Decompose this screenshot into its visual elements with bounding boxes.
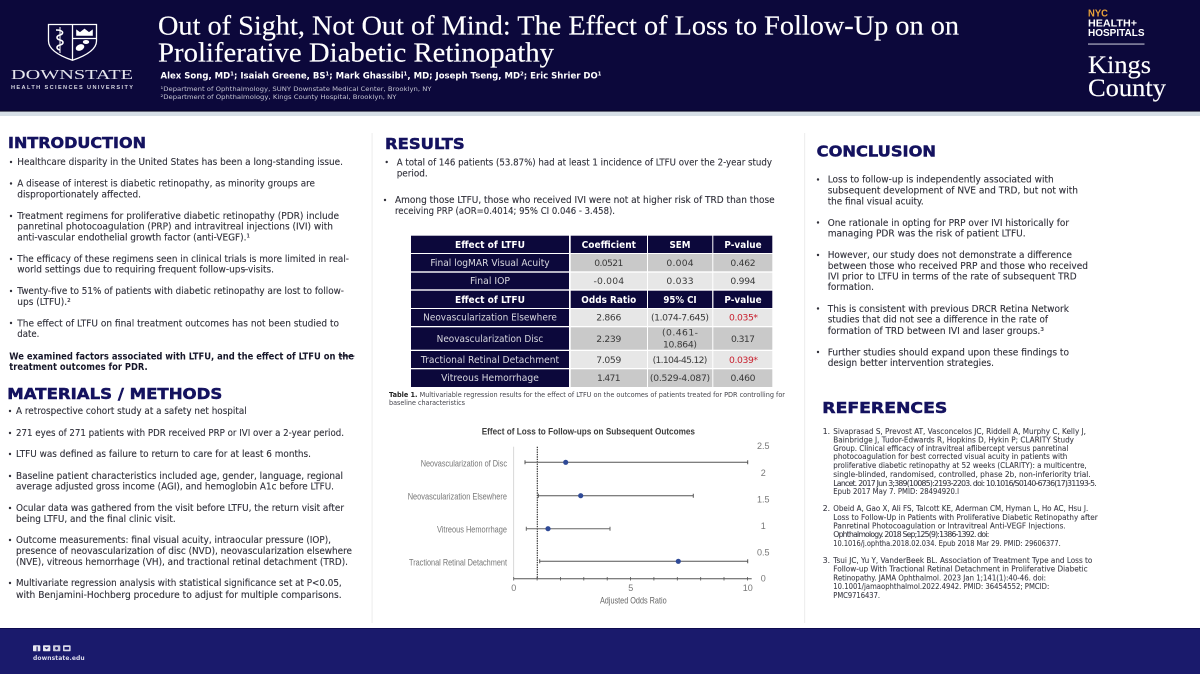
- text block: reference list: 10.1001/jamaophthalmol.2022.4942. PMID: 36454552; PMCID:: [833, 582, 1049, 591]
- row: tractional retinal detachment: Tractional Retinal Detachment: [409, 558, 507, 568]
- row: vitreous hemorrhage: Vitreous Hemorrhage: [437, 525, 507, 535]
- logo: NYC Health + Hospitals Kings County: Kings: [1088, 50, 1151, 79]
- text block: introduction bullets: date.: [17, 329, 39, 340]
- text block: reference list: Ophthalmology. 2018 Sep;125(9):1386-1392. doi:: [833, 530, 989, 539]
- text block: introduction bullets: panretinal photocoagulation (PRP) and intravitreal injections (IVI) with: [17, 222, 333, 233]
- x axis labels: 5: [628, 583, 633, 593]
- text block: conclusion bullets: Loss to follow-up is independently associated with: [828, 174, 1054, 186]
- text block: introduction bullets: Treatment regimens for proliferative diabetic retinopathy (PDR) include: [16, 211, 339, 222]
- text block: results bullets: [384, 157, 775, 217]
- text block: methods bullets: Baseline patient characteristics included age, gender, language, regional: [16, 471, 343, 482]
- text block: introduction bullets: Healthcare disparity in the United States has been a long-standing issue.: [17, 157, 343, 168]
- table: regression results: SEM: [670, 240, 690, 251]
- text block: reference list: Loss to Follow-Up in Patients with Proliferative Diabetic Retinopathy after: [833, 513, 1098, 522]
- table: regression results: Tractional Retinal Detachment: [420, 355, 559, 366]
- table: regression results: Coefficient: [582, 240, 636, 251]
- logo: NYC Health + Hospitals Kings County: [1088, 8, 1166, 102]
- text block: introduction bullets: Twenty-five to 51% of patients with diabetic retinopathy are lost to follow-: [16, 286, 344, 297]
- text block: introduction bullets: The efficacy of these regimens seen in clinical trials is more limited in real-: [16, 254, 349, 265]
- text block: methods bullets: Outcome measurements: final visual acuity, intraocular pressure (IOP),: [16, 535, 331, 546]
- text block: reference list: Panretinal Photocoagulation or Intravitreal Anti-VEGF Injections.: [833, 522, 1066, 530]
- table: regression results: 0.317: [731, 334, 755, 345]
- title: Out of Sight, Not Out of Mind: The Effect of Loss to Follow-Up on on: [158, 10, 959, 40]
- text block: methods bullets: [9, 406, 352, 601]
- table: regression results: 1.471: [597, 373, 621, 384]
- table: regression results: (0.529-4.087): [650, 373, 710, 384]
- text block: study aim: [9, 351, 355, 373]
- table: regression results: Effect of LTFU: [455, 240, 525, 251]
- table: regression results: 0.004: [666, 258, 694, 269]
- chart: forest plot of adjusted odds ratios: [408, 426, 770, 605]
- chart title: Effect of Loss to Follow-ups on Subsequent Outcomes: [482, 426, 695, 436]
- text block: methods bullets: A retrospective cohort study at a safety net hospital: [16, 406, 247, 417]
- text block: reference list: 3.: [823, 556, 830, 565]
- text block: study aim: treatment outcomes for PDR.: [9, 362, 148, 373]
- secondary y axis labels: 2.5: [757, 441, 770, 451]
- text block: introduction bullets: ups (LTFU).²: [17, 297, 71, 308]
- table caption: Table 1. Multivariable regression results for the effect of LTFU on the outcomes of patients treated for PDR controlling for: [389, 390, 785, 399]
- text block: results bullets: A total of 146 patients (53.87%) had at least 1 incidence of LTFU over the 2-year study: [397, 157, 772, 168]
- text block: introduction bullets: A disease of interest is diabetic retinopathy, as minority groups are: [17, 178, 315, 190]
- secondary y axis labels: 1.5: [757, 495, 770, 505]
- row: neovascularization elsewhere: Neovascularization Elsewhere: [408, 492, 507, 502]
- table caption: [389, 390, 785, 407]
- table: regression results: 0.039*: [729, 355, 758, 366]
- heading: conclusion: CONCLUSION: [817, 142, 936, 160]
- text block: reference list: Epub 2017 May 7. PMID: 28494920.l: [833, 487, 959, 496]
- table: regression results: Final IOP: [470, 276, 510, 287]
- text block: reference list: Follow-up With Tractional Retinal Detachment in Proliferative Diabetic: [833, 564, 1088, 574]
- title: [158, 10, 959, 68]
- text block: conclusion bullets: subsequent development of NVE and TRD, but not with: [828, 185, 1078, 196]
- panel: conclusion: [817, 142, 1088, 369]
- text block: reference list: Obeid A, Gao X, Ali FS, Talcott KE, Aderman CM, Hyman L, Ho AC, Hsu J.: [833, 504, 1088, 513]
- heading: results: RESULTS: [385, 135, 465, 153]
- text block: conclusion bullets: the final visual acuity.: [828, 196, 924, 207]
- panel: materials and methods: [7, 385, 352, 601]
- text block: introduction bullets: disproportionately affected.: [17, 189, 141, 200]
- text block: methods bullets: presence of neovascularization of disc (NVD), neovascularization elsewhere: [16, 546, 352, 557]
- x axis labels: Adjusted Odds Ratio: [600, 594, 667, 605]
- affiliations: ²Department of Ophthalmology, Kings County Hospital, Brooklyn, NY: [160, 93, 397, 101]
- text block: methods bullets: Multivariate regression analysis with statistical significance set at P<0.05,: [16, 578, 342, 589]
- text block: reference list: [823, 427, 1098, 600]
- text block: reference list: Group. Clinical efficacy of intravitreal aflibercept versus panretinal: [833, 444, 1068, 453]
- text block: results bullets: Among those LTFU, those who received IVI were not at higher risk of TRD than those: [395, 195, 775, 206]
- text block: conclusion bullets: One rationale in opting for PRP over IVI historically for: [828, 218, 1069, 229]
- table: regression results: 0.0521: [594, 258, 623, 269]
- text block: methods bullets: 271 eyes of 271 patients with PDR received PRP or IVI over a 2-year period.: [16, 428, 344, 439]
- heading: introduction: INTRODUCTION: [8, 134, 146, 152]
- text block: conclusion bullets: formation of TRD between IVI and laser groups.³: [828, 326, 1044, 337]
- text block: introduction bullets: [10, 157, 349, 340]
- table: regression results: 0.994: [730, 276, 756, 287]
- table: regression results: Final logMAR Visual Acuity: [430, 258, 550, 269]
- table: regression results: 95% CI: [663, 295, 697, 306]
- table: regression results: (0.461-: [662, 328, 698, 339]
- panel: results: [384, 135, 785, 605]
- table: regression results: (1.104-45.12): [653, 355, 707, 366]
- footer website: downstate.edu: [33, 655, 85, 662]
- table: regression results: 10.864): [663, 340, 697, 351]
- text block: reference list: Retinopathy. JAMA Ophthalmol. 2023 Jan 1;141(1):40-46. doi:: [833, 574, 1046, 582]
- row: vitreous hemorrhage: [437, 525, 610, 535]
- heading: references: REFERENCES: [822, 399, 947, 417]
- secondary y axis labels: [757, 441, 770, 584]
- table: regression results: -0.004: [593, 276, 624, 287]
- logo: NYC Health + Hospitals Kings County: HEALTH+: [1088, 18, 1137, 30]
- row: neovascularization of disc: [421, 458, 748, 468]
- table: regression results: Vitreous Hemorrhage: [441, 373, 539, 384]
- text block: results bullets: receiving PRP (aOR=0.4014; 95% CI 0.046 - 3.458).: [395, 206, 615, 217]
- text block: conclusion bullets: This is consistent with previous DRCR Retina Network: [827, 304, 1069, 315]
- text block: introduction bullets: world settings due to requiring frequent follow-ups visits.: [17, 265, 274, 276]
- logo: Downstate: [11, 24, 133, 91]
- text block: conclusion bullets: IVI prior to LTFU in terms of the rate of subsequent TRD: [828, 272, 1077, 283]
- text block: introduction bullets: anti-vascular endothelial growth factor (anti-VEGF).¹: [17, 232, 250, 243]
- text block: methods bullets: average adjusted gross income (AGI), and hemoglobin A1c before LTFU.: [16, 482, 334, 492]
- text block: methods bullets: LTFU was defined as failure to return to care for at least 6 months.: [16, 449, 311, 460]
- table: regression results: Effect of LTFU: [455, 295, 525, 306]
- secondary y axis labels: 0.5: [757, 547, 770, 557]
- panel: references: [822, 399, 1098, 600]
- text block: conclusion bullets: studies that did not see a difference in the rate of: [828, 314, 1049, 326]
- text block: results bullets: period.: [397, 168, 428, 179]
- title: Proliferative Diabetic Retinopathy: [158, 36, 554, 68]
- text block: reference list: single-blinded, randomised, controlled, phase 2b, non-inferiority trial.: [833, 470, 1091, 479]
- text block: conclusion bullets: managing PDR was the risk of patient LTFU.: [828, 228, 1026, 240]
- text block: reference list: Tsui JC, Yu Y, VanderBeek BL. Association of Treatment Type and Loss to: [832, 556, 1093, 565]
- table: regression results: P-value: [724, 240, 762, 251]
- x axis labels: [511, 583, 753, 605]
- logo: Downstate: HEALTH SCIENCES UNIVERSITY: [11, 85, 133, 91]
- text block: conclusion bullets: However, our study does not demonstrate a difference: [828, 250, 1072, 261]
- table: regression results: 0.460: [730, 373, 756, 384]
- table: regression results: [411, 236, 772, 387]
- text block: reference list: proliferative diabetic retinopathy at 52 weeks (CLARITY): a multicentre,: [833, 461, 1087, 470]
- text block: conclusion bullets: Further studies should expand upon these findings to: [828, 348, 1069, 358]
- text block: conclusion bullets: [817, 174, 1088, 369]
- text block: reference list: 1.: [823, 427, 830, 436]
- panel: introduction: [8, 134, 354, 373]
- affiliations: [160, 85, 432, 101]
- text block: reference list: 10.1016/j.ophtha.2018.02.034. Epub 2018 Mar 29. PMID: 29606377.: [833, 539, 1061, 548]
- text block: methods bullets: (NVE), vitreous hemorrhage (VH), and tractional retinal detachment (TRD).: [16, 557, 348, 568]
- text block: methods bullets: with Benjamini-Hochberg procedure to adjust for multiple comparisons.: [16, 590, 342, 601]
- text block: reference list: photocoagulation for best corrected visual acuity in patients with: [833, 452, 1067, 461]
- table caption: baseline characteristics: [389, 398, 465, 407]
- secondary y axis labels: 2: [761, 468, 766, 478]
- text block: reference list: Lancet. 2017 Jun 3;389(10085):2193-2203. doi: 10.1016/S0140-6736(17)31193-5.: [833, 479, 1097, 488]
- logo: NYC Health + Hospitals Kings County: HOSPITALS: [1088, 28, 1145, 39]
- logo: NYC Health + Hospitals Kings County: NYC: [1088, 8, 1108, 20]
- text block: introduction bullets: The effect of LTFU on final treatment outcomes has not been studied to: [16, 318, 339, 329]
- row: neovascularization of disc: Neovascularization of Disc: [421, 458, 507, 468]
- secondary y axis labels: 0: [761, 574, 766, 584]
- text block: reference list: PMC9716437.: [833, 591, 880, 600]
- x axis labels: 0: [511, 583, 516, 593]
- footer banner: [0, 628, 1200, 674]
- table: regression results: Neovascularization Elsewhere: [423, 312, 557, 324]
- table: regression results: 0.035*: [729, 312, 758, 324]
- table: regression results: 0.033: [666, 276, 694, 287]
- logo: Downstate: DOWNSTATE: [11, 67, 133, 82]
- logo: NYC Health + Hospitals Kings County: County: [1088, 73, 1166, 102]
- table: regression results: (1.074-7.645): [651, 312, 709, 324]
- icons: social media: [33, 645, 71, 651]
- authors: Alex Song, MD¹; Isaiah Greene, BS¹; Mark Ghassibi¹, MD; Joseph Tseng, MD²; Eric Shrier DO¹: [160, 71, 602, 81]
- header banner: [0, 0, 1200, 116]
- text block: study aim: We examined factors associated with LTFU, and the effect of LTFU on the: [9, 351, 354, 362]
- table: regression results: 2.239: [596, 334, 621, 345]
- text block: methods bullets: being LTFU, and the final clinic visit.: [16, 514, 176, 525]
- affiliations: ¹Department of Ophthalmology, SUNY Downstate Medical Center, Brooklyn, NY: [160, 85, 432, 93]
- table: regression results: 0.462: [730, 258, 756, 269]
- x axis labels: 10: [743, 583, 753, 593]
- table: regression results: 7.059: [596, 355, 621, 366]
- text block: conclusion bullets: formation.: [828, 282, 874, 293]
- secondary y axis labels: 1: [761, 521, 766, 531]
- table: regression results: P-value: [724, 295, 762, 306]
- row: neovascularization elsewhere: [408, 492, 693, 502]
- table: regression results: Odds Ratio: [581, 295, 637, 306]
- text block: conclusion bullets: design better intervention strategies.: [828, 358, 994, 369]
- row: tractional retinal detachment: [409, 558, 748, 568]
- table: regression results: Neovascularization Disc: [437, 334, 543, 345]
- text block: conclusion bullets: between those who received PRP and those who received: [828, 261, 1088, 272]
- icon: shield: [48, 24, 96, 60]
- text block: reference list: Bainbridge J, Tudor-Edwards R, Hopkins D, Hykin P; CLARITY Study: [833, 436, 1074, 444]
- text block: reference list: 2.: [823, 504, 830, 513]
- text block: methods bullets: Ocular data was gathered from the visit before LTFU, the return visit after: [16, 503, 344, 514]
- text block: reference list: Sivaprasad S, Prevost AT, Vasconcelos JC, Riddell A, Murphy C, Kelly J,: [833, 427, 1086, 436]
- heading: materials and methods: MATERIALS / METHODS: [7, 385, 222, 403]
- table: regression results: 2.866: [596, 312, 621, 324]
